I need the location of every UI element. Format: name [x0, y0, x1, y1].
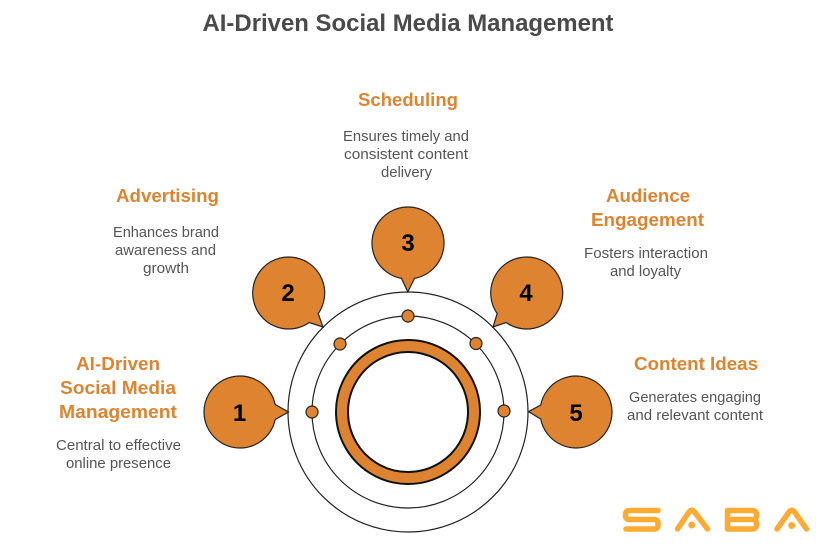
- text block: Audience Engagement: Fosters interaction: [584, 246, 708, 262]
- bubble 4: [491, 257, 563, 329]
- bubble 1: 1: [233, 400, 246, 427]
- text block: Audience Engagement: Engagement: [591, 210, 704, 230]
- text block: Advertising: Advertising: [116, 186, 219, 206]
- text block: AI-Driven Social Media Management: Management: [59, 402, 177, 422]
- text block: Audience Engagement: and loyalty: [610, 264, 682, 280]
- bubble 4: 4: [519, 280, 533, 307]
- text block: AI-Driven Social Media Management: online presence: [66, 456, 171, 472]
- text block: Scheduling: consistent content: [344, 147, 468, 163]
- text block: AI-Driven Social Media Management: AI-Driven: [76, 354, 160, 374]
- bubble 3: 3: [401, 230, 415, 257]
- text block: Scheduling: delivery: [381, 165, 433, 181]
- text block: Advertising: [113, 186, 219, 277]
- bubble 5: 5: [569, 400, 583, 427]
- text block: AI-Driven Social Media Management: Central to effective: [56, 438, 181, 454]
- text block: Audience Engagement: Audience: [606, 186, 690, 206]
- central orange ring: [336, 340, 480, 484]
- bubble 1: [204, 376, 288, 448]
- orbit dots: [306, 310, 510, 418]
- bubble 3: [372, 207, 444, 292]
- text block: Content Ideas: Content Ideas: [634, 354, 758, 374]
- text block: Advertising: growth: [143, 261, 189, 277]
- title: AI-Driven Social Media Management: [202, 10, 614, 37]
- logo: SABA: [626, 510, 806, 529]
- text block: Content Ideas: [627, 354, 763, 424]
- text block: AI-Driven Social Media Management: [56, 354, 181, 472]
- text block: Advertising: Enhances brand: [113, 225, 219, 241]
- text block: Scheduling: Scheduling: [358, 90, 458, 110]
- central diagram: [288, 292, 528, 532]
- text block: Scheduling: Ensures timely and: [343, 129, 469, 145]
- text block: Content Ideas: Generates engaging: [629, 390, 761, 406]
- text block: Content Ideas: and relevant content: [627, 408, 763, 424]
- bubble 5: [528, 376, 612, 448]
- text block: Audience Engagement: [584, 186, 708, 280]
- text block: Scheduling: [343, 90, 469, 181]
- outer orbit ring: [288, 292, 528, 532]
- bubble 2: [253, 257, 325, 329]
- text block: Advertising: awareness and: [115, 243, 216, 259]
- bubble 2: 2: [281, 280, 295, 307]
- middle orbit ring: [312, 316, 504, 508]
- text block: AI-Driven Social Media Management: Social Media: [60, 378, 177, 398]
